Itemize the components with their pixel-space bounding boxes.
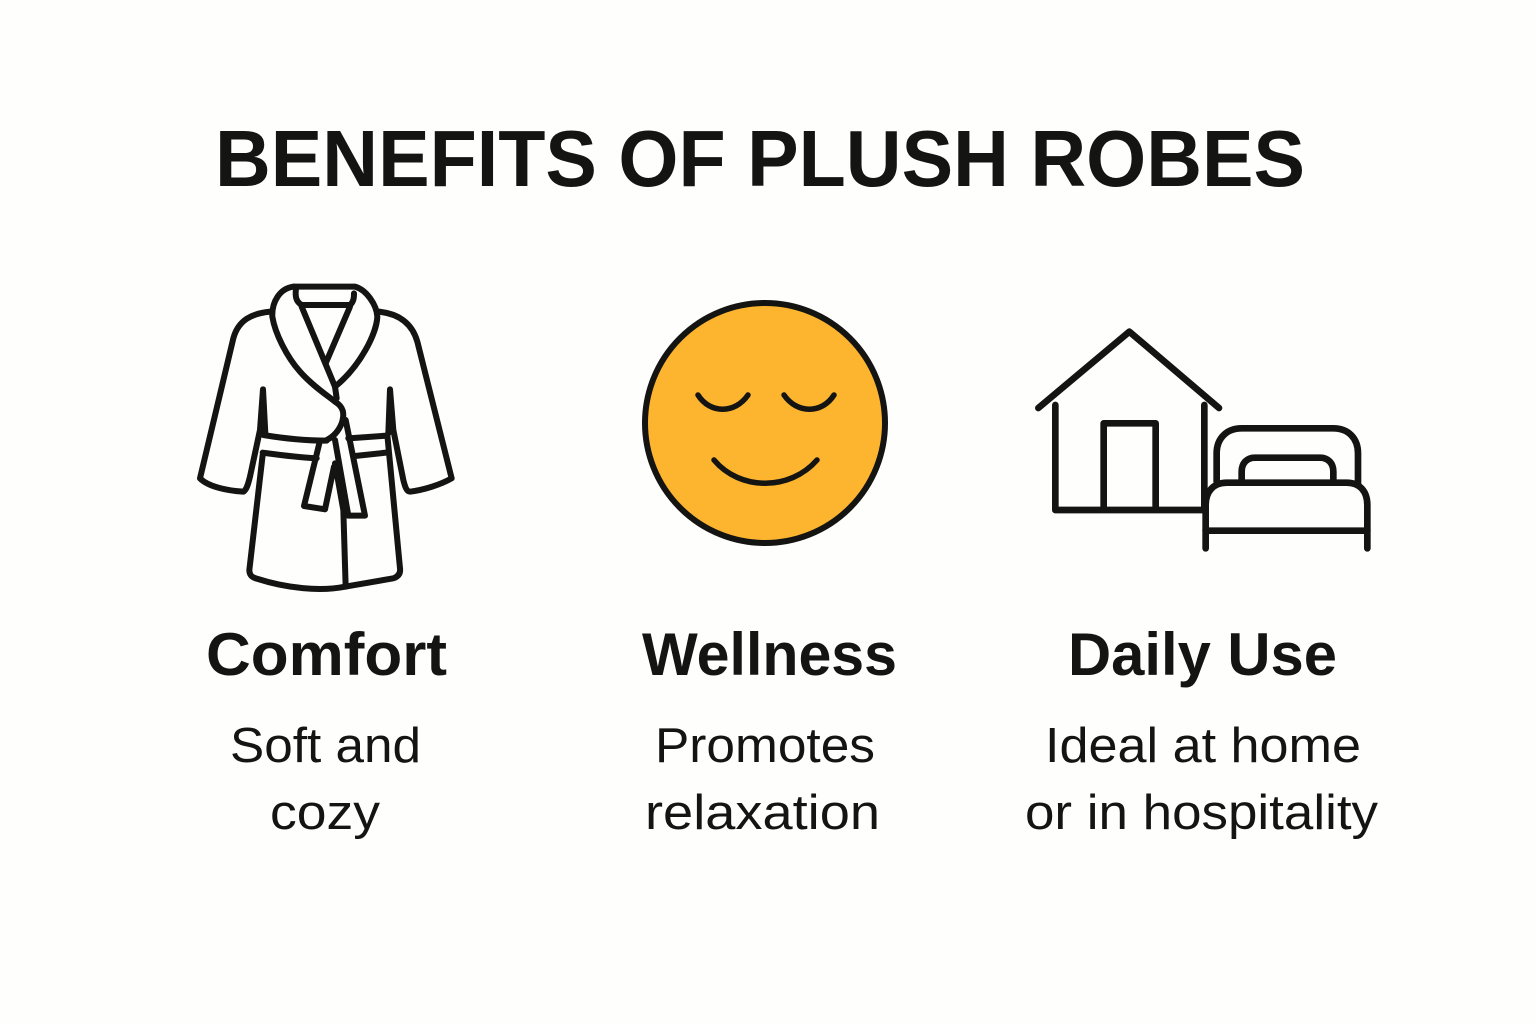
- heading: wellness: Wellness: [642, 621, 897, 688]
- text: promotes relaxation: relaxation: [645, 786, 880, 840]
- text: soft and cozy: cozy: [270, 786, 381, 840]
- icon: bathrobe: [200, 287, 452, 589]
- title: BENEFITS OF PLUSH ROBES: [215, 114, 1305, 203]
- heading: daily use: Daily Use: [1068, 621, 1337, 688]
- text: ideal at home or in hospitality: [1025, 719, 1379, 840]
- panel: comfort: [200, 287, 452, 840]
- text: soft and cozy: [230, 719, 421, 840]
- panel: daily use: [1025, 332, 1379, 840]
- heading: comfort: Comfort: [206, 621, 447, 688]
- icon: house and bed: [1038, 332, 1367, 548]
- panel: wellness: [642, 303, 897, 840]
- text: ideal at home or in hospitality: Ideal at home: [1045, 719, 1361, 773]
- icon: smiling face: [645, 303, 885, 543]
- text: ideal at home or in hospitality: or in hospitality: [1025, 786, 1379, 840]
- text: promotes relaxation: Promotes: [655, 719, 875, 773]
- text: soft and cozy: Soft and: [230, 719, 421, 773]
- text: promotes relaxation: [645, 719, 880, 840]
